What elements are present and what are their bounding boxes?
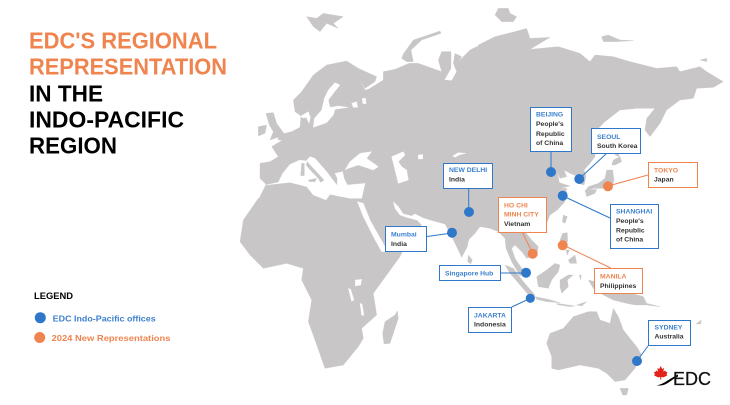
callout: Shanghai — [558, 191, 658, 248]
island: Svalbard — [307, 13, 343, 32]
lake: Victoria — [355, 279, 362, 286]
title: IN THE — [29, 81, 103, 107]
sea: Kattegat — [301, 112, 310, 123]
island: Wrangel — [700, 58, 707, 62]
sea: Mediterranean, Black Sea and Caspian — [266, 152, 423, 200]
callout: Jakarta: JAKARTA — [474, 313, 506, 320]
callout: Shanghai: People's — [616, 218, 644, 225]
callout: New Delhi: NEW DELHI — [449, 167, 487, 174]
sea: Persian Gulf — [393, 202, 422, 220]
callout: Ho Chi Minh City: HO CHI — [504, 202, 528, 209]
callout: Sydney: SYDNEY — [654, 324, 683, 332]
sea: Red Sea — [357, 202, 387, 252]
callout: Ho Chi Minh City — [498, 198, 546, 259]
legend — [34, 291, 171, 343]
callout: Shanghai: of China — [616, 237, 643, 244]
land: Indonesia, Philippines and Papua New Guinea — [505, 215, 701, 395]
callout: Manila: Philippines — [600, 283, 636, 290]
island: New Siberian Islands — [602, 35, 633, 42]
callout: Shanghai: Republic — [616, 228, 645, 235]
callout: Shanghai: SHANGHAI — [616, 209, 652, 216]
callout: Beijing: People's — [536, 121, 564, 128]
island: Severnaya Zemlya — [495, 8, 517, 22]
callout: Manila — [558, 240, 642, 294]
island: Ireland — [258, 125, 267, 136]
icon: maple leaf — [654, 366, 667, 380]
callout: Tokyo — [603, 162, 698, 191]
world map — [240, 8, 723, 395]
island: Hainan — [537, 227, 543, 233]
title: REGION — [29, 132, 117, 158]
callout: Singapore Hub — [440, 266, 531, 280]
land: Japan — [585, 150, 622, 197]
title — [29, 27, 227, 158]
callout: Singapore Hub: Singapore Hub — [445, 270, 493, 278]
land: western Europe and central Asia — [258, 13, 482, 200]
callout: Mumbai: India — [391, 241, 407, 248]
callout: Mumbai — [386, 226, 457, 252]
logo: EDC: EDC — [673, 369, 711, 389]
title: REPRESENTATION — [29, 53, 227, 79]
logo: EDC — [654, 366, 711, 389]
callout: Ho Chi Minh City: Vietnam — [504, 221, 530, 228]
callout: Jakarta: Indonesia — [474, 322, 506, 329]
callout: Sydney: Australia — [654, 334, 684, 341]
land: Australia — [547, 308, 642, 382]
title: INDO-PACIFIC — [29, 107, 184, 133]
land: Scandinavia and northern Russia — [278, 31, 482, 140]
callout: Tokyo: TOKYO — [654, 167, 678, 174]
callout: New Delhi — [444, 164, 492, 217]
legend item: offices: EDC Indo-Pacific offices — [53, 314, 156, 324]
icon: swoosh — [656, 374, 678, 386]
callout: Sydney — [632, 320, 690, 366]
land: Siberia and Far East — [478, 8, 723, 200]
callout: Seoul — [574, 128, 640, 184]
legend: LEGEND — [34, 291, 73, 302]
island: Sri Lanka — [468, 255, 472, 264]
callout: Beijing: of China — [536, 140, 563, 147]
island: Great Britain — [266, 113, 285, 140]
callout: New Delhi: India — [449, 176, 465, 184]
callout: Beijing: BEIJING — [536, 112, 563, 119]
island: Madagascar — [383, 311, 398, 344]
callout: Mumbai: Mumbai — [391, 232, 417, 239]
legend item: new representations: 2024 New Representations — [52, 333, 171, 343]
callout: Seoul: South Korea — [597, 143, 638, 150]
title: EDC'S REGIONAL — [29, 27, 217, 53]
island: Novaya Zemlya — [402, 31, 441, 62]
land: Africa, Arabia and India — [240, 198, 482, 368]
land: South-East Asia mainland — [468, 188, 567, 276]
callout: Ho Chi Minh City: MINH CITY — [504, 212, 539, 219]
callout: Tokyo: Japan — [654, 177, 674, 184]
callout: Manila: MANILA — [600, 274, 627, 281]
callout: Seoul: SEOUL — [597, 134, 620, 141]
callout: Jakarta — [468, 294, 535, 332]
callout: Beijing — [530, 108, 572, 177]
sea: Baltic — [313, 83, 348, 127]
callout: Beijing: Republic — [536, 131, 565, 138]
